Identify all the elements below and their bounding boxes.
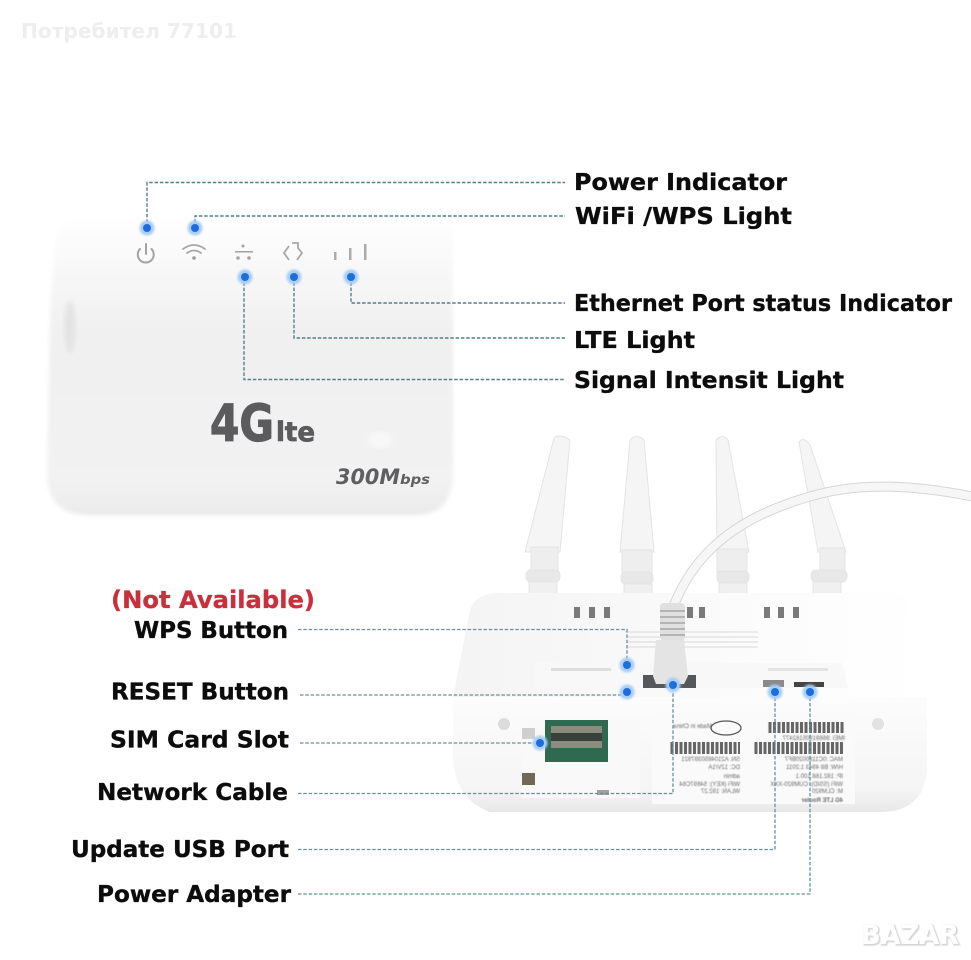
port recess — [535, 663, 848, 688]
vents — [574, 607, 799, 618]
front face — [453, 697, 927, 812]
device sticker: H/W: B8 4943 1:2011 — [786, 765, 843, 771]
device sticker: MAC :0C1180020BF7 — [784, 757, 843, 763]
power port — [794, 682, 824, 687]
SIM panel — [521, 720, 640, 798]
labels: ports and buttons — [71, 618, 292, 908]
labels: indicators: Signal Intensit Light — [574, 368, 844, 394]
icon: ethernet — [235, 244, 253, 260]
grill lines — [628, 632, 758, 647]
labels: ports and buttons: Update USB Port — [71, 837, 289, 863]
speed label: 300M — [336, 465, 400, 489]
watermark: BAZAR: BAZAR — [862, 921, 960, 952]
icon: wifi — [183, 245, 205, 260]
labels: indicators: Power Indicator — [574, 170, 788, 196]
CCC mark — [711, 721, 741, 735]
labels: indicators: Ethernet Port status Indicator — [574, 291, 953, 317]
logo: 4G lte: lte — [276, 417, 315, 448]
router back view — [453, 436, 971, 812]
device sticker: WiFi (SSID): CUM920-XXX — [770, 782, 843, 788]
labels: indicators: WiFi /WPS Light — [575, 204, 792, 230]
speed label — [336, 465, 430, 489]
labels: ports and buttons: Power Adapter — [97, 882, 292, 908]
note: not available: (Not Available) — [111, 586, 315, 614]
device sticker: IMEI :86691905162477 — [782, 736, 845, 742]
labels: indicators — [574, 170, 953, 394]
speed label: bps — [400, 473, 430, 488]
Ethernet port — [643, 675, 696, 688]
connector lines: top group — [147, 182, 565, 380]
screws — [498, 718, 510, 730]
top surface — [453, 593, 927, 697]
device sticker: 4G LTE Router — [801, 798, 843, 804]
device sticker — [652, 713, 855, 804]
indicator dots: bottom group — [532, 658, 818, 750]
indicator dots: top group — [140, 220, 358, 284]
labels: ports and buttons: SIM Card Slot — [110, 728, 289, 754]
device sticker: WLAN: 192.27 — [700, 789, 740, 795]
icon: power — [138, 244, 154, 263]
antennas — [525, 436, 847, 608]
watermark: user name: Потребител 77101 — [21, 19, 237, 43]
device sticker: admin — [724, 774, 740, 780]
connector lines: bottom group — [298, 630, 810, 894]
device sticker: SN: A2104650397921 — [681, 757, 740, 763]
icon: signal bars — [334, 244, 366, 260]
labels: ports and buttons: Network Cable — [97, 780, 288, 806]
cable plug — [653, 603, 688, 684]
device sticker: DC: 12V/1A — [708, 765, 740, 771]
device sticker: Made in China — [673, 724, 712, 730]
labels: ports and buttons: WPS Button — [134, 618, 288, 644]
network cable — [674, 487, 971, 605]
device sticker: M: CLM920 — [811, 789, 843, 795]
labels: ports and buttons: RESET Button — [111, 680, 289, 706]
device sticker: IP: 192.168.100.1 — [795, 774, 843, 780]
logo: 4G lte: 4G — [210, 395, 274, 454]
labels: indicators: LTE Light — [574, 328, 695, 354]
watermark: BAZAR: BAZAR — [861, 920, 959, 951]
router front panel — [47, 215, 453, 515]
icon: LTE — [284, 243, 302, 260]
USB port — [763, 680, 784, 687]
device sticker: WiFi (KEY): 54697C64 — [679, 782, 740, 788]
